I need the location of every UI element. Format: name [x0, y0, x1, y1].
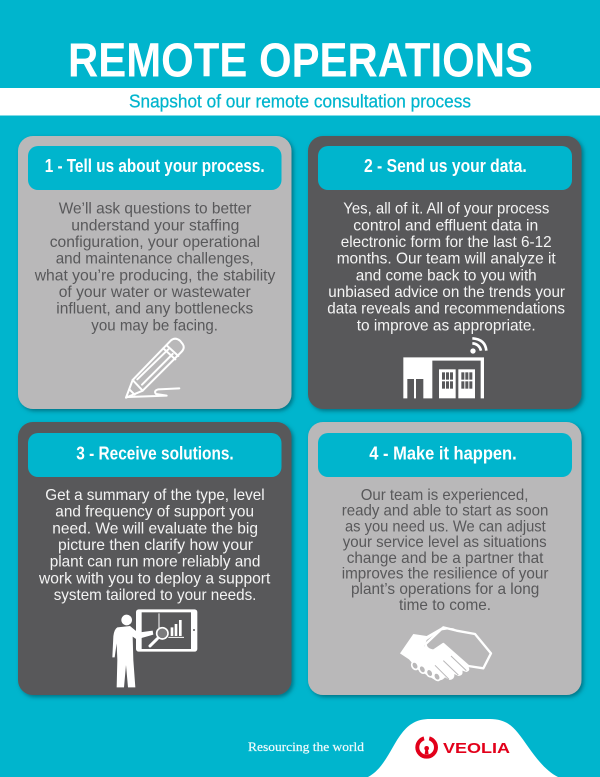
panel: step 1	[18, 136, 292, 409]
step 1 text: understand your staffing	[71, 217, 239, 234]
panel: step 2	[308, 136, 582, 409]
step 3 text: Get a summary of the type, level	[45, 487, 265, 504]
step 3 text: work with you to deploy a support	[38, 570, 271, 587]
step 1 text: We’ll ask questions to better	[59, 201, 252, 218]
step 2 text: to improve as appropriate.	[357, 317, 536, 334]
step 4 text: plant’s operations for a long	[351, 581, 539, 598]
step 4 text: change and be a partner that	[347, 550, 544, 567]
icon: pencil	[126, 339, 184, 398]
step 1 text: what you’re producing, the stability	[34, 267, 275, 284]
icon: handshake	[400, 627, 491, 682]
step 3 text: system tailored to your needs.	[54, 587, 256, 604]
step 4 heading: 4 - Make it happen.	[369, 442, 517, 463]
step 1 text: you may be facing.	[91, 317, 218, 334]
panel: step 3	[18, 422, 292, 695]
subtitle band	[0, 88, 600, 116]
tagline: Resourcing the world	[248, 740, 365, 754]
step 2 text: unbiased advice on the trends your	[328, 284, 566, 301]
step 4 text: time to come.	[399, 597, 491, 614]
step 2 text: electronic form for the last 6-12	[341, 234, 552, 251]
panel: step 4	[308, 422, 582, 695]
step 4 text: improves the resilience of your	[342, 566, 549, 582]
step 2 heading: 2 - Send us your data.	[364, 155, 527, 176]
step 4 text	[342, 487, 549, 614]
step 4 text: your service level as situations	[343, 534, 547, 551]
step 2 text: months. Our team will analyze it	[337, 251, 556, 268]
step 4 text: ready and able to start as soon	[342, 503, 548, 520]
step 3 heading	[28, 433, 282, 477]
step 2 text: and come back to you with	[356, 267, 537, 284]
step 1 text	[34, 201, 275, 334]
step 1 text: and maintenance challenges,	[56, 251, 254, 268]
step 3 text: need. We will evaluate the big	[52, 520, 258, 537]
footer logo	[368, 719, 558, 777]
step 3 text	[38, 487, 271, 604]
step 4 text: as you need us. We can adjust	[345, 518, 546, 535]
step 4 text: Our team is experienced,	[361, 487, 528, 504]
step 1 heading	[28, 146, 282, 190]
step 2 text: Yes, all of it. All of your process	[343, 201, 549, 218]
logo mark	[417, 735, 436, 757]
step 3 text: picture then clarify how your	[58, 537, 254, 554]
step 2 text: data reveals and recommendations	[327, 301, 565, 318]
step 1 text: configuration, your operational	[50, 234, 260, 251]
subtitle: Snapshot of our remote consultation process	[129, 92, 471, 112]
step 2 heading	[318, 146, 572, 190]
step 3 heading: 3 - Receive solutions.	[76, 442, 234, 463]
step 1 text: of your water or wastewater	[59, 284, 251, 301]
step 2 text	[327, 201, 566, 334]
icon: presenter with tablet	[112, 609, 197, 687]
step 3 text: plant can run more reliably and	[50, 554, 260, 571]
logo wordmark: VEOLIA	[443, 740, 510, 757]
step 2 text: control and effluent data in	[353, 217, 538, 234]
step 1 heading: 1 - Tell us about your process.	[45, 155, 265, 176]
icon: connected plant	[403, 338, 486, 398]
title: REMOTE OPERATIONS	[68, 35, 533, 88]
step 4 heading	[318, 433, 572, 477]
step 3 text: and frequency of support you	[55, 504, 254, 521]
step 1 text: influent, and any bottlenecks	[56, 301, 253, 318]
